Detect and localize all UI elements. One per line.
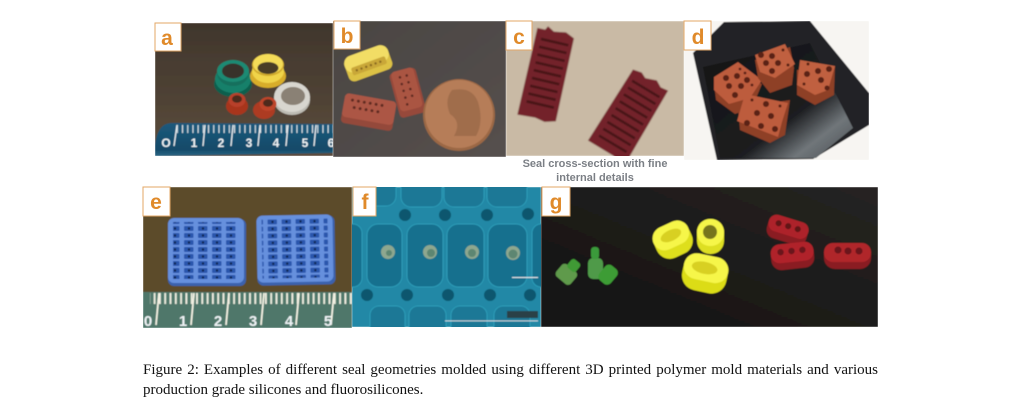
ruler: 3: [246, 136, 253, 150]
label c: c: [513, 26, 525, 49]
panel b: connector seals and penny photo: [333, 21, 506, 157]
icon: red brick 4: [737, 94, 790, 143]
ruler: 3: [249, 313, 257, 330]
caption: panel c: internal details: [556, 172, 634, 184]
icon: small red rings: [226, 93, 276, 119]
ruler: [155, 123, 335, 156]
icon: red brick 2: [755, 44, 795, 93]
icon: blue plate left: [168, 218, 246, 286]
label b: [334, 21, 360, 49]
panel a: rings photo: [155, 23, 335, 156]
ruler: 0: [144, 313, 152, 330]
cell row: top: [376, 187, 528, 208]
icon: pins: [381, 245, 520, 260]
icon: left cross-section seal: [517, 24, 576, 124]
label g: g: [550, 191, 562, 214]
scale bar: [445, 277, 538, 321]
ruler: 1: [179, 313, 187, 330]
icon: red brick 3: [797, 60, 835, 105]
icon: red seals: [764, 213, 871, 271]
label a: a: [161, 27, 173, 50]
icon: wells: [361, 208, 536, 301]
icon: black tray: [693, 21, 869, 160]
label d: [684, 21, 711, 50]
panel g: coloured seals on black: [541, 187, 878, 327]
icon: yellow ring: [250, 54, 286, 88]
panel e: blue plates photo: [143, 187, 352, 330]
ruler: 5: [324, 313, 332, 330]
label g: [542, 187, 570, 216]
ruler: 1: [191, 136, 198, 150]
icon: green seals: [554, 247, 620, 287]
ruler: 2: [218, 136, 225, 150]
ruler: [143, 292, 352, 330]
icon: left red connector seal: [340, 93, 397, 131]
caption: panel c: Seal cross-section with fine: [523, 158, 667, 170]
panel c: seal cross-section photo: [506, 21, 684, 163]
icon: penny: [423, 79, 495, 151]
icon: white ring: [274, 82, 310, 115]
icon: right red connector seal: [388, 66, 427, 119]
ruler: 5: [302, 136, 309, 150]
caption: panel c: [523, 158, 667, 184]
icon: red brick 1: [714, 62, 762, 114]
label c: [506, 21, 532, 50]
ruler: O: [161, 136, 171, 150]
cell row: bottom: [369, 306, 531, 327]
ruler: 4: [285, 313, 294, 330]
cell row: middle: [340, 224, 552, 287]
panel f: microscope image: [352, 187, 541, 327]
figure caption: [143, 362, 878, 398]
label f: f: [362, 191, 370, 214]
icon: yellow connector seal: [342, 43, 394, 83]
figure caption: production grade silicones and fluorosilicones.: [143, 382, 423, 398]
ruler: 2: [214, 313, 222, 330]
icon: right cross-section seal: [588, 69, 668, 156]
label f: [353, 187, 376, 216]
label e: e: [150, 191, 162, 214]
label d: d: [692, 26, 704, 49]
label e: [143, 187, 170, 216]
icon: green ring: [214, 60, 252, 97]
figure caption: Figure 2: Examples of different seal geometries molded using different 3D printed polymer mold materials and various: [143, 362, 878, 378]
icon: blue plate right: [256, 214, 336, 286]
label b: b: [341, 25, 353, 48]
ruler: 4: [273, 136, 280, 150]
ruler: 6: [328, 136, 335, 150]
label a: [155, 23, 181, 51]
icon: yellow seals: [649, 217, 731, 296]
panel d: tray with brick seals photo: [684, 21, 869, 160]
